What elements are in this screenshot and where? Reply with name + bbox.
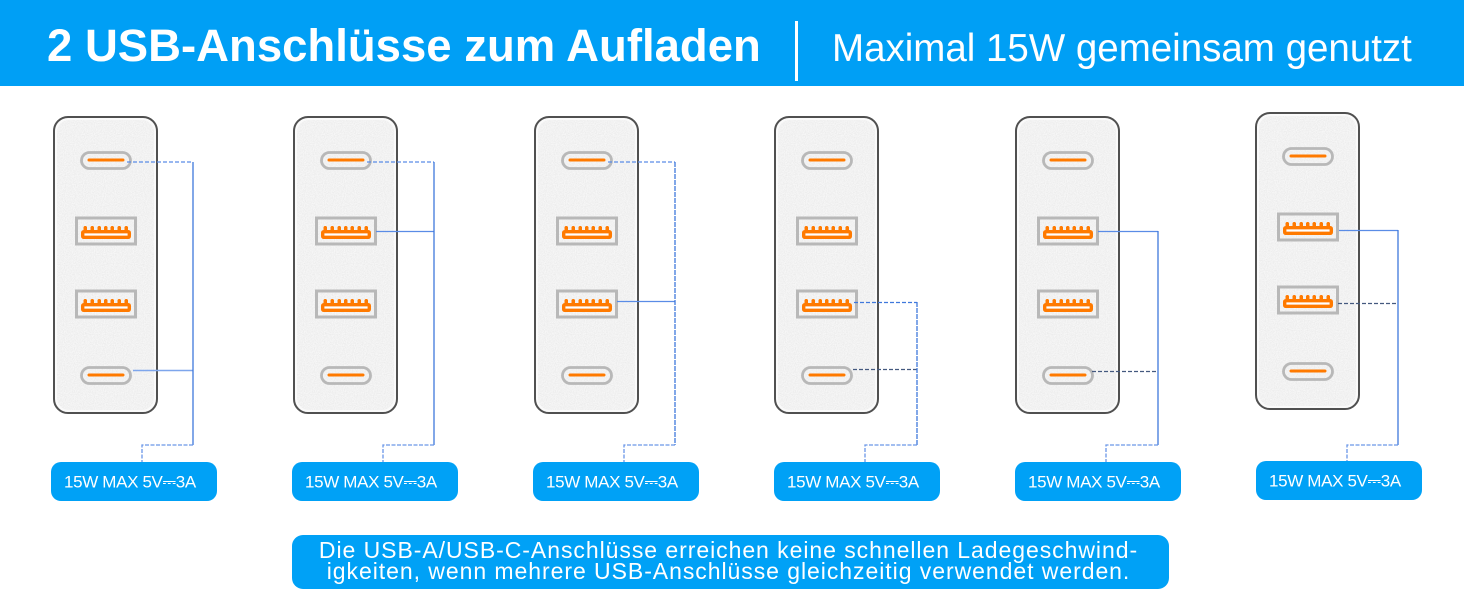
charger body 4	[775, 117, 878, 413]
power badge 6: 15W MAX 5V⎓3A	[1269, 472, 1402, 490]
panel: charger 2, upper USB-C and upper USB-A	[292, 117, 458, 501]
connector lines 6	[1338, 230, 1398, 461]
ports 4	[798, 152, 856, 384]
panel: charger 6, upper USB-A and lower USB-A	[1256, 113, 1422, 500]
header banner	[0, 0, 1464, 86]
charger body 1	[54, 117, 157, 413]
power badge 4	[774, 462, 940, 501]
ports 1	[76, 152, 136, 384]
connector lines 4	[853, 302, 917, 462]
power badge 1	[51, 462, 217, 501]
connector lines 3	[608, 162, 675, 462]
title: 2 USB-Anschlüsse zum Aufladen	[47, 20, 761, 71]
connector lines 5	[1092, 231, 1158, 462]
power badge 2	[292, 462, 458, 501]
power badge 5	[1015, 462, 1181, 501]
charger body 2	[294, 117, 397, 413]
callout: bottom note: Die USB-A/USB-C-Anschlüsse erreichen keine schnellen Ladegeschwind-	[319, 537, 1138, 563]
panel: charger 1, upper USB-C and lower USB-C	[51, 117, 217, 501]
power badge 1: 15W MAX 5V⎓3A	[64, 472, 197, 492]
ports 6	[1278, 148, 1338, 380]
charger body 5	[1016, 117, 1119, 413]
power badge 6	[1256, 461, 1422, 500]
charger body 3	[535, 117, 638, 413]
power badge 4: 15W MAX 5V⎓3A	[787, 472, 920, 492]
header divider	[795, 21, 798, 81]
callout: bottom note	[292, 535, 1169, 589]
connector lines 2	[367, 162, 434, 462]
subtitle: Maximal 15W gemeinsam genutzt	[832, 27, 1412, 70]
panel: charger 4, lower USB-A and lower USB-C	[774, 117, 940, 501]
ports 3	[558, 152, 616, 384]
power badge 2: 15W MAX 5V⎓3A	[305, 472, 438, 492]
power badge 5: 15W MAX 5V⎓3A	[1028, 472, 1161, 492]
ports 5	[1038, 152, 1098, 384]
power badge 3: 15W MAX 5V⎓3A	[546, 472, 679, 492]
callout: bottom note: igkeiten, wenn mehrere USB-Anschlüsse gleichzeitig verwendet werden.	[327, 558, 1130, 584]
charger body 6	[1256, 113, 1359, 409]
connector lines 1	[127, 162, 193, 462]
ports 2	[316, 152, 376, 384]
power badge 3	[533, 462, 699, 501]
panel: charger 5, upper USB-A and lower USB-C	[1015, 117, 1181, 501]
panel: charger 3, upper USB-C and lower USB-A	[533, 117, 699, 501]
